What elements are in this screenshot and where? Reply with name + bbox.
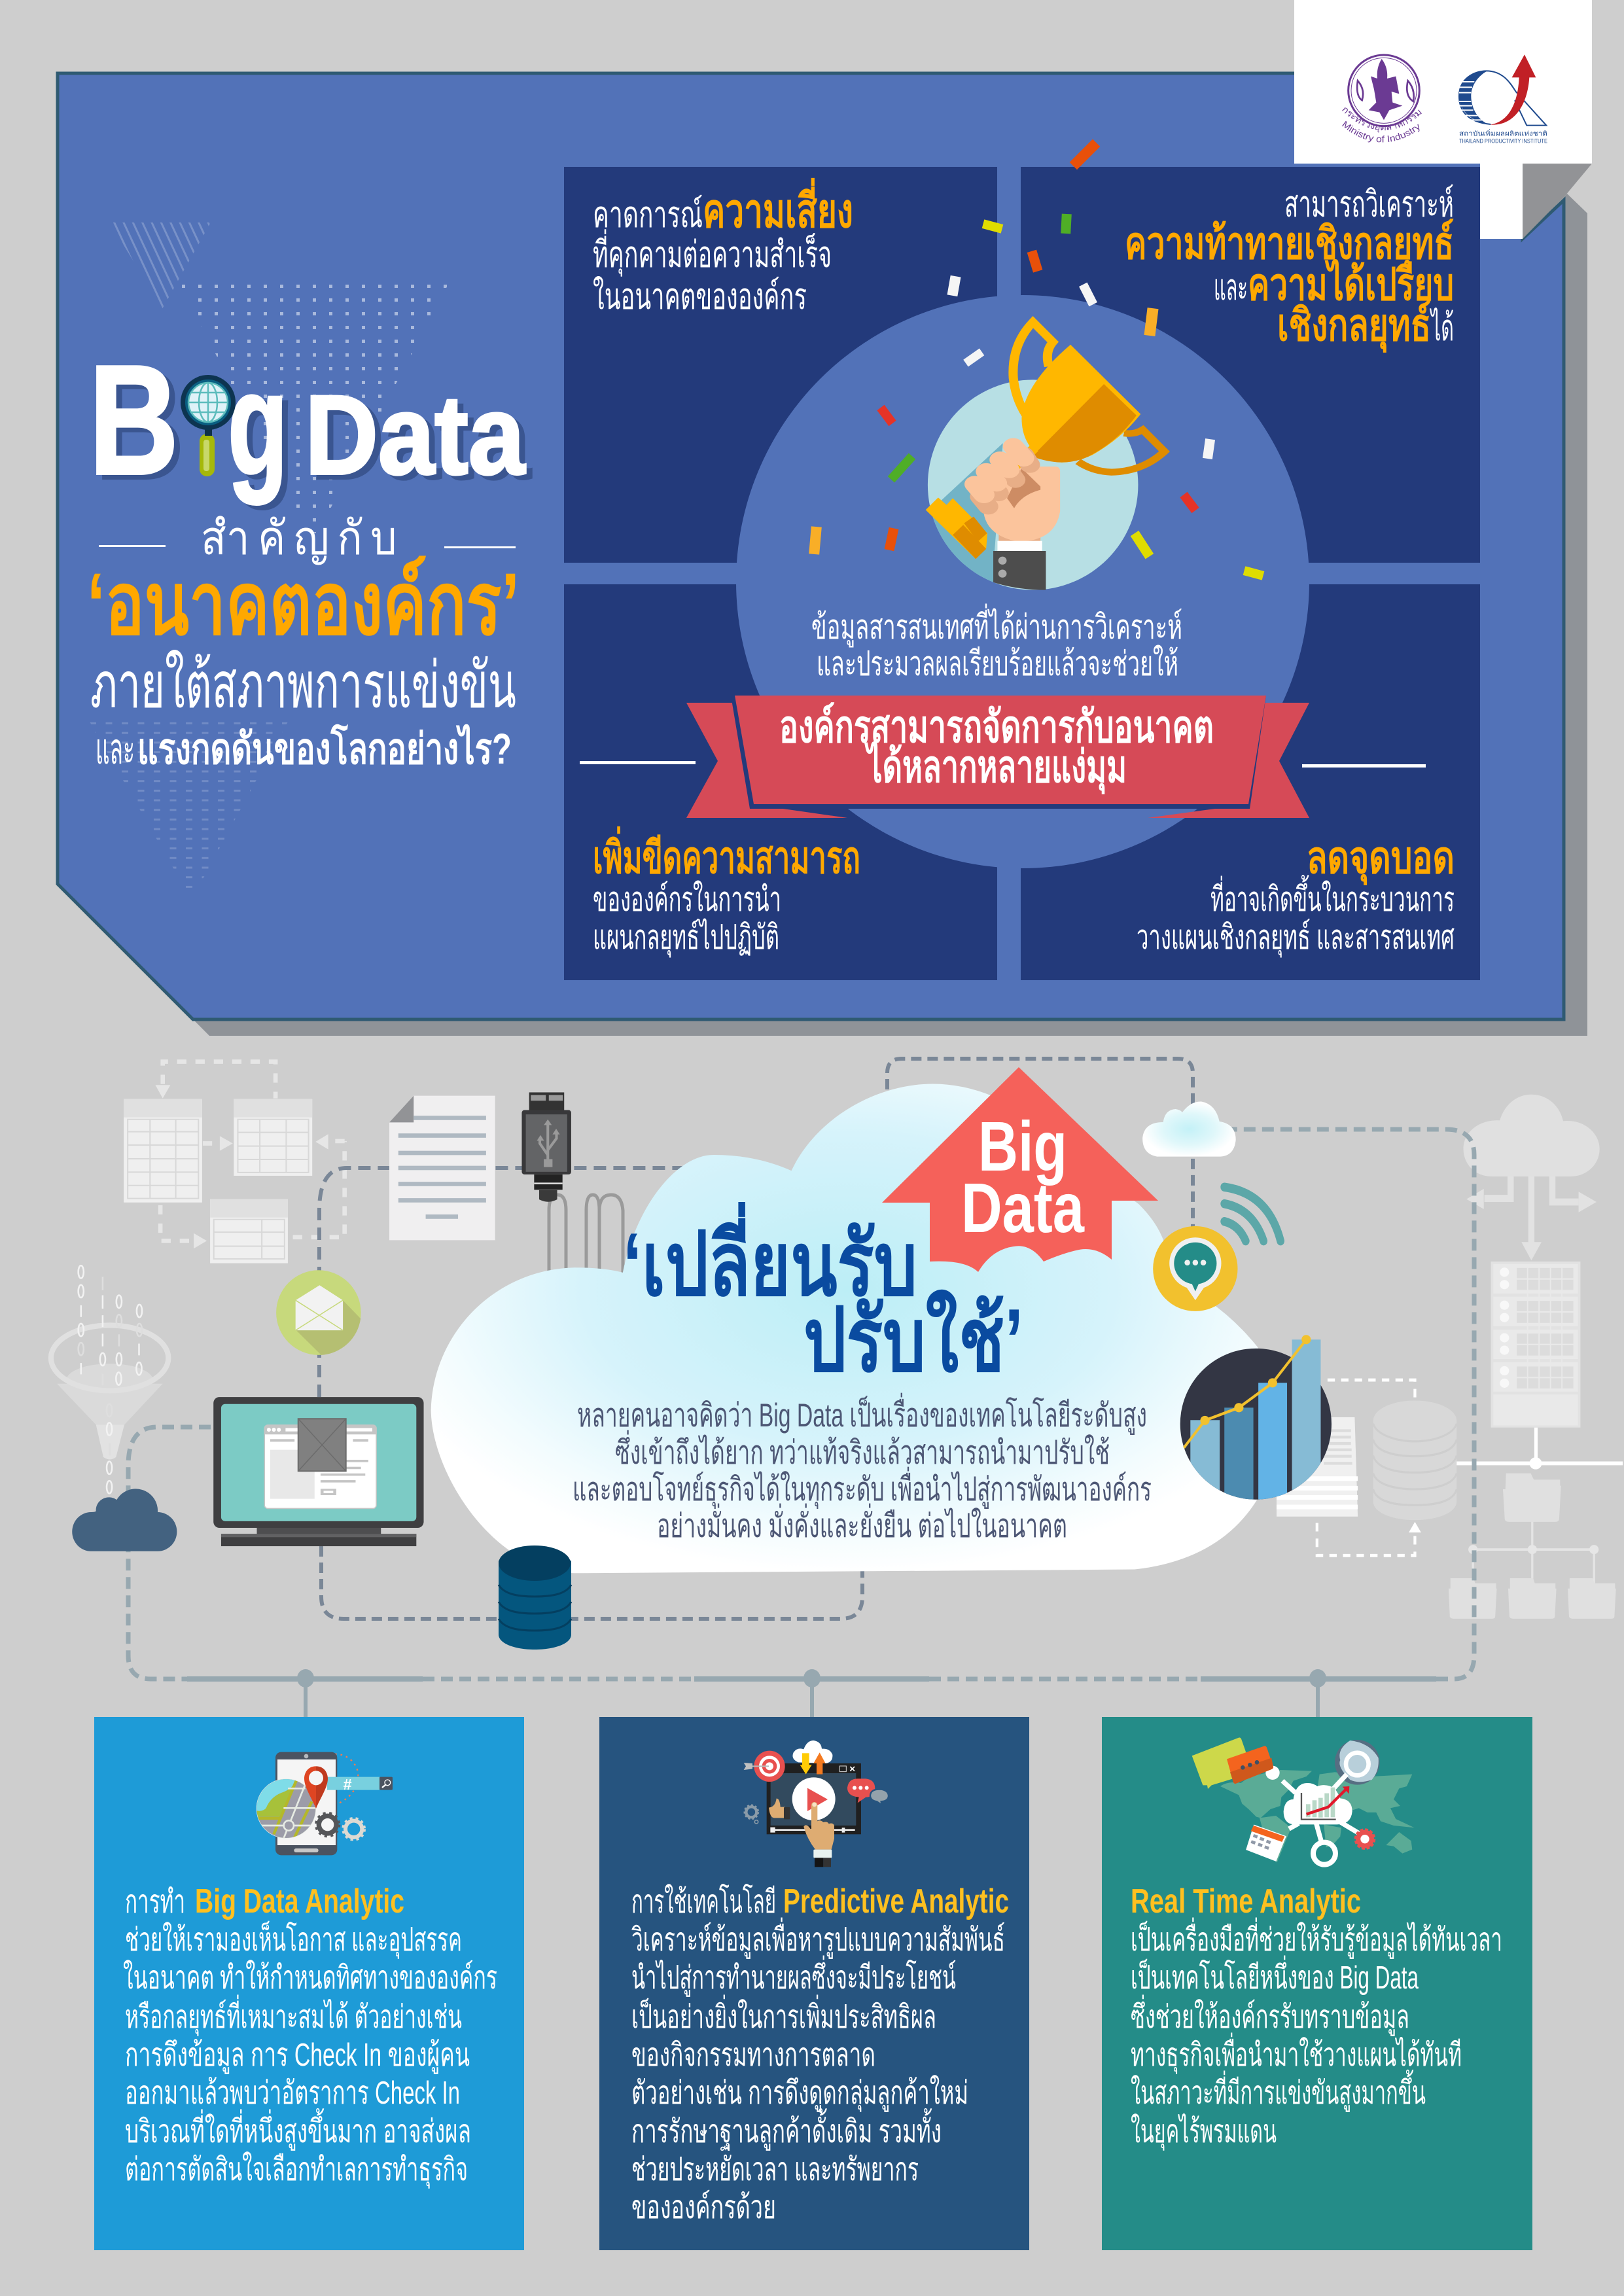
text block: bottom-right blind spots: ลดจุดบอด xyxy=(1307,833,1455,885)
text block: top-left risk: ที่คุกคามต่อความสำเร็จ xyxy=(593,229,832,277)
panel text: การใช้เทคโนโลยี xyxy=(631,1883,776,1920)
icon: trophy in hand xyxy=(926,322,1165,592)
text block: top-right strategy: เชิงกลยุทธ์ xyxy=(1277,300,1431,353)
panel text: หรือกลยุทธ์ที่เหมาะสมได้ ตัวอย่างเช่น xyxy=(125,1994,462,2036)
text block: cloud paragraph: ซึ่งเข้าถึงได้ยาก ทว่าแท้จริงแล้วสามารถนำมาปรับใช้ xyxy=(615,1430,1110,1471)
central circle xyxy=(736,295,1309,868)
panel text: ในสภาวะที่มีการแข่งขันสูงมากขึ้น xyxy=(1131,2070,1426,2112)
logo box xyxy=(1294,0,1592,239)
panel text: Real Time Analytic xyxy=(1131,1882,1361,1920)
text block: centre description: และประมวลผลเรียบร้อยแล้วจะช่วยให้ xyxy=(817,645,1178,683)
heading: อนาคตองค์กร: ‘อนาคตองค์กร’ xyxy=(87,556,520,653)
ribbon banner xyxy=(686,696,1309,818)
icon: funnel with binary numbers xyxy=(51,1265,168,1493)
panel text: บริเวณที่ใดที่หนึ่งสูงขึ้นมาก อาจส่งผล xyxy=(125,2108,471,2151)
panel text: ในยุคไร้พรมแดน xyxy=(1131,2113,1277,2151)
panel text xyxy=(631,1882,1009,2225)
icon: grey database xyxy=(1373,1401,1456,1520)
panel: top blue panel xyxy=(58,73,1587,1036)
heading: และแรงกดดันของโลกอย่างไร xyxy=(96,723,512,773)
text block: top-right strategy: และ xyxy=(1214,266,1248,308)
panel text: ตัวอย่างเช่น การดึงดูดกลุ่มลูกค้าใหม่ xyxy=(631,2075,968,2112)
text block: top-right strategy xyxy=(1125,183,1454,353)
panel text: ช่วยประหยัดเวลา และทรัพยากร xyxy=(631,2152,919,2187)
panel: Predictive Analytic xyxy=(599,1717,1029,2250)
icon: phone with map xyxy=(255,1752,393,1855)
text block: bottom-left capability: ขององค์กรในการนำ xyxy=(593,880,781,919)
text block: cloud paragraph: อย่างมั่นคง มั่งคั่งและยั่งยืน ต่อไปในอนาคต xyxy=(657,1504,1067,1544)
text block: top-left risk: ในอนาคตขององค์กร xyxy=(593,275,807,317)
heading: เปลี่ยนรับ ปรับใช้: ‘เปลี่ยนรับ xyxy=(623,1201,917,1314)
heading: และแรงกดดันของโลกอย่างไร: และ xyxy=(96,724,135,773)
panel text: เป็นอย่างยิ่งในการเพิ่มประสิทธิผล xyxy=(631,1994,936,2035)
panel text: ในอนาคต ทำให้กำหนดทิศทางขององค์กร xyxy=(123,1960,497,1996)
title: Big Data xyxy=(89,334,525,507)
text block: top-right strategy: ความได้เปรียบ xyxy=(1248,258,1454,309)
text block: cloud paragraph: หลายคนอาจคิดว่า Big Data เป็นเรื่องของเทคโนโลยีระดับสูง xyxy=(577,1393,1147,1435)
icon: paper stack xyxy=(1277,1417,1358,1517)
heading: subtitle สำคัญกับ xyxy=(99,512,516,565)
heading: และแรงกดดันของโลกอย่างไร: แรงกดดันของโลกอย่างไร? xyxy=(137,723,512,773)
text block: top-right strategy: ได้ xyxy=(1430,307,1454,348)
panel text: Predictive Analytic xyxy=(783,1882,1009,1920)
icon: dark blue cloud xyxy=(72,1489,177,1551)
panel text: การดึงข้อมูล การ Check In ของผู้คน xyxy=(125,2038,470,2074)
icon: phone with map: # xyxy=(344,1776,352,1793)
text block: centre description xyxy=(811,603,1182,683)
icon: faded right cloud, server and folders xyxy=(1317,1095,1623,1619)
icon: USB drive xyxy=(521,1092,571,1202)
text block: top-left risk: คาดการณ์ xyxy=(593,194,703,235)
chart: growth bars in circle xyxy=(1180,1335,1332,1502)
logo: Thailand Productivity Institute: THAILAND PRODUCTIVITY INSTITUTE xyxy=(1459,137,1547,144)
heading: เปลี่ยนรับ ปรับใช้: ปรับใช้’ xyxy=(803,1289,1023,1390)
panel: dark quadrants xyxy=(564,167,1480,980)
big cloud xyxy=(431,1084,1266,1573)
dot pattern xyxy=(177,278,451,533)
dashed triangle xyxy=(90,722,288,891)
icon: Big Data arrow: Data xyxy=(961,1168,1085,1247)
icon: laptop xyxy=(213,1397,424,1546)
connector bar with nodes xyxy=(187,1669,1436,1718)
panel text xyxy=(1131,1882,1502,2151)
logo: Ministry of Industry seal: กระทรวงอุตสาหกรรม xyxy=(1342,107,1422,133)
icon: magnifier globe xyxy=(181,375,236,476)
lines: white dashes beside ribbon xyxy=(580,761,1426,768)
panel text: ออกมาแล้วพบว่าอัตราการ Check In xyxy=(125,2075,460,2111)
panel text: นำไปสู่การทำนายผลซึ่งจะมีประโยชน์ xyxy=(631,1955,956,1997)
panel text: Big Data Analytic xyxy=(195,1882,404,1920)
text block: bottom-left capability xyxy=(593,826,860,958)
panel text: วิเคราะห์ข้อมูลเพื่อหารูปแบบความสัมพันธ์ xyxy=(631,1917,1005,1959)
icon: coil tubes xyxy=(549,1195,623,1273)
icon: Big Data arrow xyxy=(882,1067,1158,1272)
icon: world map cloud network xyxy=(1192,1738,1415,1865)
dashed white connector xyxy=(1317,1380,1421,1555)
text block: bottom-right blind spots: ที่อาจเกิดขึ้นในกระบวนการ xyxy=(1210,875,1455,919)
dashed connector lines xyxy=(128,1059,1474,1679)
title: Big Data: g xyxy=(228,343,288,505)
title: Big Data: Data xyxy=(305,372,525,498)
icon: wifi speech badge xyxy=(1153,1187,1280,1311)
logo: Ministry of Industry seal: Ministry of Industry xyxy=(1342,120,1420,143)
panel text: เป็นเทคโนโลยีหนึ่งของ Big Data xyxy=(1131,1955,1419,1996)
text block: centre description: ข้อมูลสารสนเทศที่ได้ผ่านการวิเคราะห์ xyxy=(811,603,1182,648)
icon: envelope badge xyxy=(276,1270,361,1355)
text block: top-left risk xyxy=(593,177,853,317)
panel: Real Time Analytic xyxy=(1102,1717,1532,2250)
icon: spreadsheets and document flow xyxy=(124,1062,345,1263)
logo: Thailand Productivity Institute: สถาบันเพิ่มผลผลิตแห่งชาติ xyxy=(1459,129,1547,138)
text block: cloud paragraph: และตอบโจทย์ธุรกิจได้ในทุกระดับ เพื่อนำไปสู่การพัฒนาองค์กร xyxy=(573,1467,1152,1509)
text block: top-left risk: ความเสี่ยง xyxy=(703,177,853,238)
ribbon text xyxy=(779,702,1214,794)
icon: small cloud xyxy=(1142,1102,1236,1157)
text block: top-right strategy: สามารถวิเคราะห์ xyxy=(1284,183,1454,224)
title: Big Data: B xyxy=(89,334,179,507)
heading: ภายใต้สภาพการแข่งขัน: ภายใต้สภาพการแข่งขัน xyxy=(90,649,516,721)
panel text xyxy=(123,1882,497,2189)
icon: document xyxy=(389,1096,495,1240)
hatch triangle xyxy=(110,222,211,309)
text block: cloud paragraph xyxy=(573,1393,1152,1544)
icon: database xyxy=(499,1545,571,1650)
logo: Ministry of Industry seal xyxy=(1342,54,1422,143)
heading: subtitle สำคัญกับ: สำคัญกับ xyxy=(201,512,405,565)
panel text: ต่อการตัดสินใจเลือกทำเลการทำธุรกิจ xyxy=(125,2151,468,2189)
ribbon text: องค์กรสามารถจัดการกับอนาคต xyxy=(779,702,1214,752)
panel text: ขององค์กรด้วย xyxy=(631,2189,776,2225)
icon: video player xyxy=(744,1740,889,1867)
heading: เปลี่ยนรับ ปรับใช้ xyxy=(623,1201,1023,1390)
panel text: ของกิจกรรมทางการตลาด xyxy=(631,2038,875,2073)
panel text: การรักษาฐานลูกค้าดั้งเดิม รวมทั้ง xyxy=(631,2108,942,2151)
panel text: ช่วยให้เรามองเห็นโอกาส และอุปสรรค xyxy=(125,1920,462,1959)
text block: bottom-left capability: เพิ่มขีดความสามารถ xyxy=(593,826,860,883)
text block: bottom-right blind spots xyxy=(1137,833,1455,958)
icon: confetti xyxy=(809,139,1264,580)
ribbon text: ได้หลากหลายแง่มุม xyxy=(864,741,1127,794)
icon: Big Data arrow: Big xyxy=(978,1106,1067,1186)
panel: Big Data Analytic xyxy=(94,1717,524,2250)
panel text: การทำ xyxy=(125,1884,185,1920)
text block: top-right strategy: ความท้าทายเชิงกลยุทธ์ xyxy=(1125,219,1454,271)
logo: Thailand Productivity Institute xyxy=(1459,54,1547,144)
text block: bottom-left capability: แผนกลยุทธ์ไปปฏิบัติ xyxy=(593,918,779,958)
panel text: ซึ่งช่วยให้องค์กรรับทราบข้อมูล xyxy=(1131,1994,1409,2036)
